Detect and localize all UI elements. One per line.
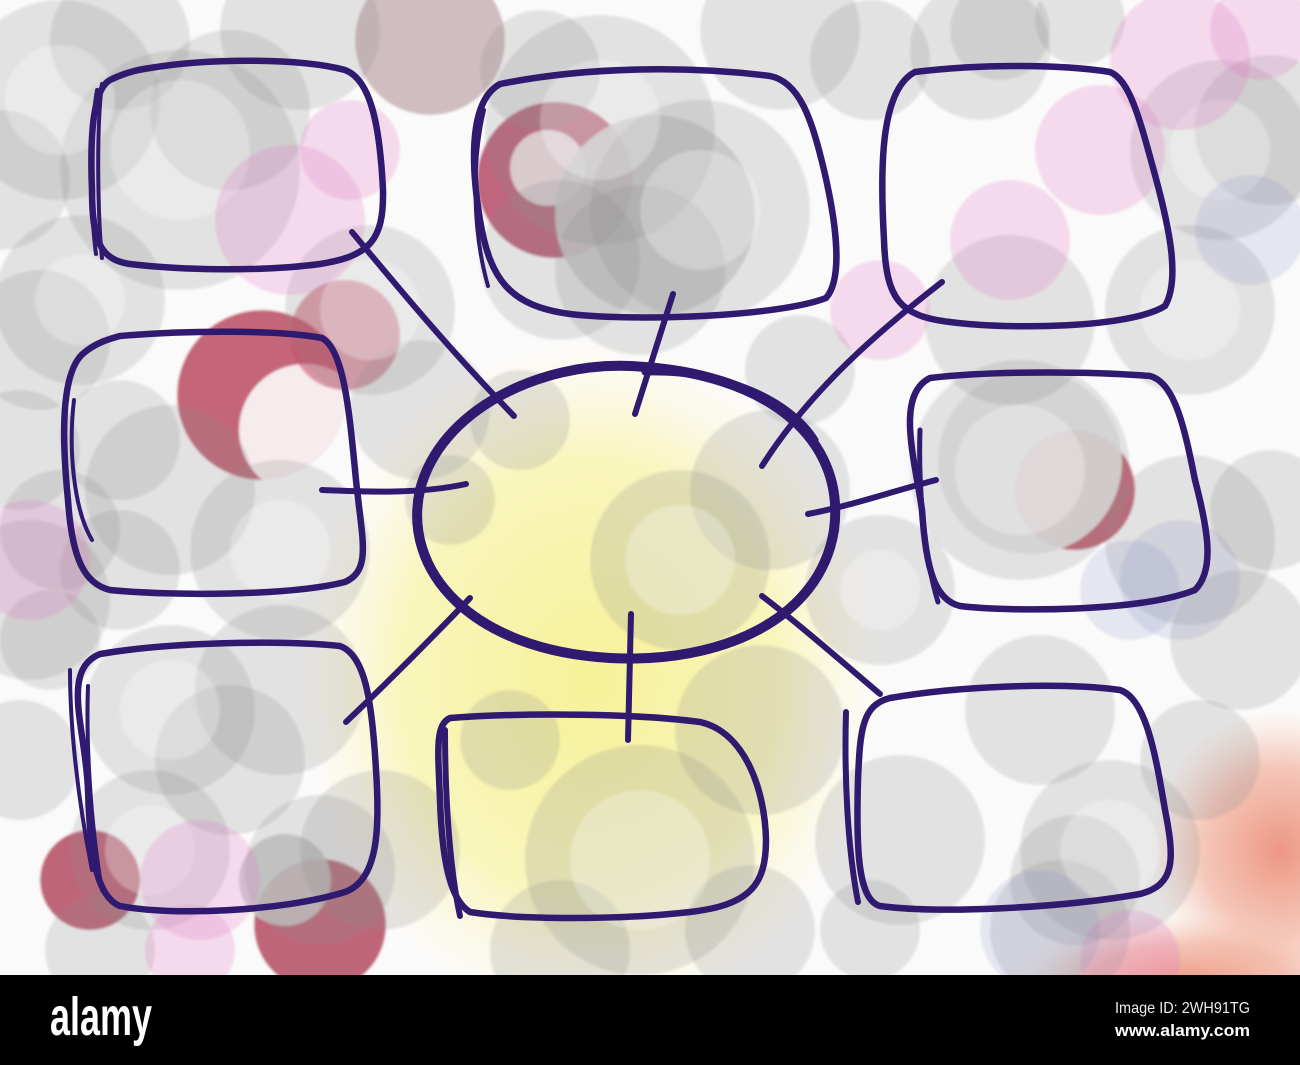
footer bar	[0, 975, 1300, 1065]
footer image id: Image ID: 2WH91TG	[1115, 1000, 1250, 1017]
red crescents	[40, 0, 1135, 991]
footer url: www.alamy.com	[1114, 1021, 1250, 1040]
footer logo: alamy	[50, 987, 152, 1047]
box: bottom centre	[438, 715, 766, 918]
central ellipse node	[417, 366, 835, 659]
box: middle left	[64, 332, 363, 594]
box: top centre	[474, 69, 836, 317]
box: bottom left	[70, 643, 378, 911]
diagram	[64, 61, 1208, 918]
box: top left	[91, 61, 383, 269]
box: middle right	[910, 372, 1208, 609]
connector lines	[322, 232, 942, 740]
box: top right	[882, 66, 1172, 326]
box: bottom right	[846, 686, 1171, 910]
